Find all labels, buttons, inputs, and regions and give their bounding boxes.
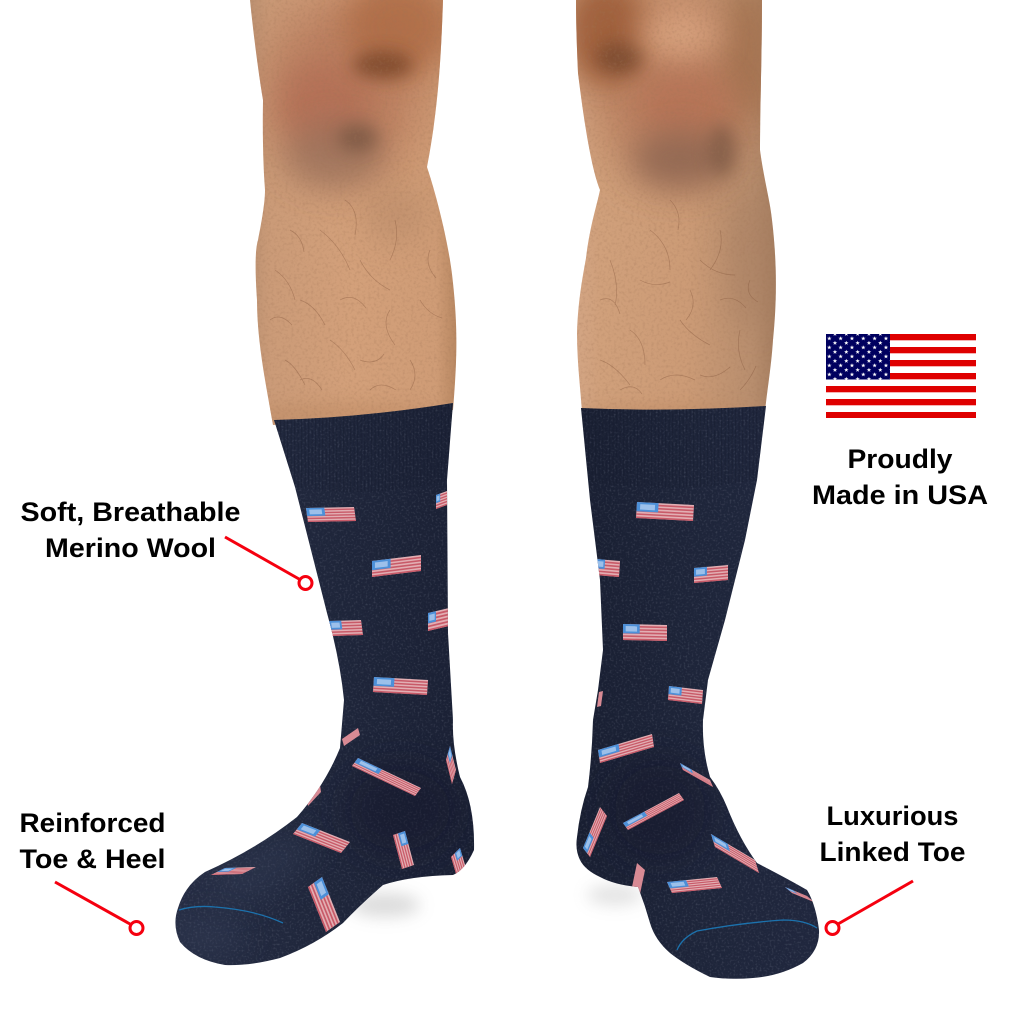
label: Reinforced Toe & Heel: Reinforced bbox=[20, 808, 166, 838]
right sock bbox=[576, 406, 819, 979]
label: Soft, Breathable Merino Wool bbox=[20, 497, 240, 563]
label: Reinforced Toe & Heel bbox=[20, 808, 166, 874]
callout: toe and heel bbox=[55, 882, 143, 934]
sock texture bbox=[170, 400, 825, 985]
toe seam: left sock bbox=[179, 906, 283, 923]
leg hair texture bbox=[240, 0, 785, 430]
label: Proudly Made in USA: Proudly bbox=[848, 444, 952, 474]
right leg bbox=[563, 0, 776, 425]
large American flag bbox=[826, 334, 976, 418]
toe seam: right sock bbox=[677, 920, 817, 950]
label: Proudly Made in USA: Made in USA bbox=[812, 480, 988, 510]
label: Luxurious Linked Toe bbox=[820, 801, 966, 867]
label: Soft, Breathable Merino Wool: Merino Wool bbox=[45, 533, 216, 563]
label: Reinforced Toe & Heel: Toe & Heel bbox=[20, 844, 166, 874]
left sock bbox=[175, 403, 474, 965]
label: Luxurious Linked Toe: Luxurious bbox=[826, 801, 958, 831]
callout: merino wool bbox=[225, 537, 312, 590]
callout: linked toe bbox=[826, 881, 913, 934]
flag pattern: left sock bbox=[211, 491, 466, 932]
shadows under feet bbox=[350, 885, 643, 917]
label: Soft, Breathable Merino Wool: Soft, Breathable bbox=[20, 497, 240, 527]
label: Luxurious Linked Toe: Linked Toe bbox=[820, 837, 966, 867]
left leg bbox=[245, 0, 456, 427]
label: Proudly Made in USA bbox=[812, 444, 988, 510]
flag pattern: right sock bbox=[583, 502, 814, 902]
